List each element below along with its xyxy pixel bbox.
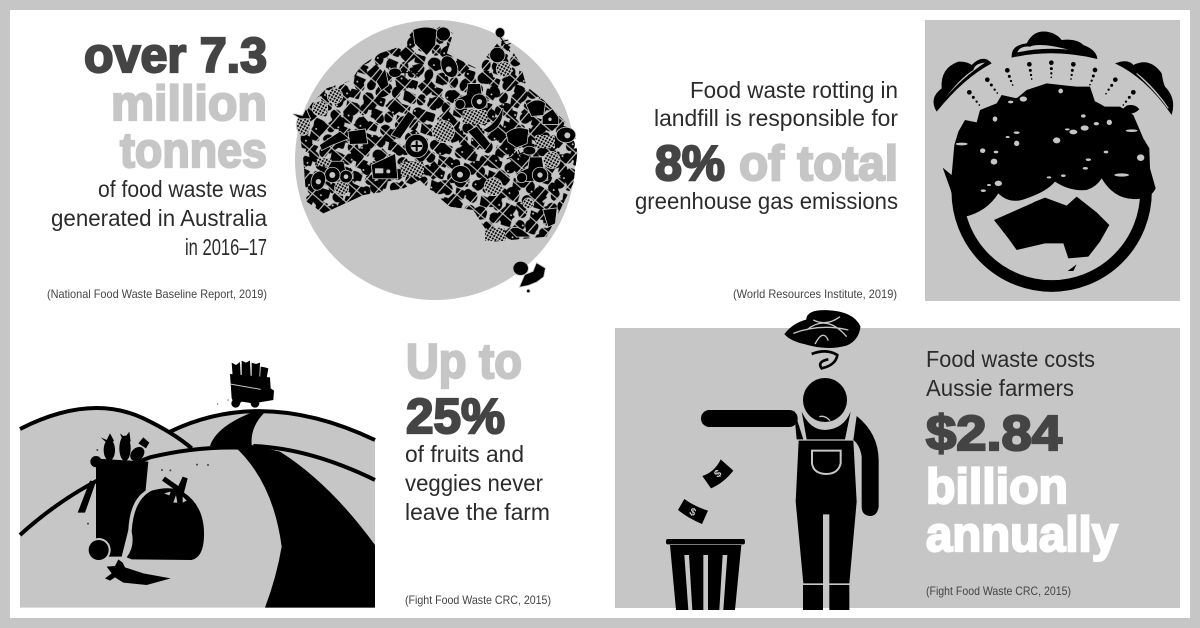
icon: discarded carrot [105, 559, 171, 585]
heading: up to 25%: 25% [406, 390, 505, 444]
text block: tonnage description: of food waste was [98, 176, 267, 202]
text block: tonnage description: generated in Australia [51, 205, 267, 231]
icon: Tasmania food cluster [513, 262, 545, 292]
icon: falling banknotes: $ [687, 506, 698, 519]
heading: over 7.3 million tonnes [84, 29, 267, 178]
heading: $2.84 billion annually: annually [926, 508, 1118, 562]
icon: trash can [666, 539, 745, 610]
panel: cost to farmers [615, 311, 1180, 610]
icon: farmer figure [701, 378, 879, 610]
icon: chicken leg [320, 132, 348, 150]
icon: right cloud [1115, 61, 1173, 115]
text block: fruit and veg: veggies never [405, 470, 543, 496]
icon: Australia silhouette [994, 197, 1109, 271]
heading: up to 25% [406, 335, 522, 444]
heading: over 7.3 million tonnes: tonnes [120, 124, 267, 178]
source: World Resources Institute: (World Resources Institute, 2019) [733, 287, 897, 301]
globe ring [957, 97, 1146, 286]
heading: over 7.3 million tonnes: million [111, 77, 267, 131]
heading: $2.84 billion annually: billion [926, 460, 1068, 514]
heading: $2.84 billion annually [926, 407, 1118, 562]
icon: lettuces [413, 27, 450, 55]
icon: rising gas dots [967, 60, 1136, 106]
heading: 8% of total: of total [739, 137, 898, 191]
icon: avocados [438, 54, 461, 80]
icon: truck with carrots [230, 361, 274, 408]
icon: falling banknotes [678, 459, 733, 524]
icon: small fish on heap [1120, 105, 1139, 114]
text block: tonnage description: in 2016–17 [185, 234, 267, 260]
icon: rubbish bag [123, 477, 206, 562]
illustration: farmer dropping money in a bin [666, 311, 879, 610]
text block: cost intro [926, 346, 1095, 401]
text block: landfill intro [654, 77, 898, 131]
text block: cost intro: Food waste costs [926, 346, 1095, 372]
icon: round plate [405, 135, 428, 157]
text block: fruit and veg: of fruits and [405, 441, 524, 467]
heading: 8% of total: 8% [655, 137, 725, 191]
text block: greenhouse gas emissions: greenhouse gas emissions [635, 188, 898, 214]
decorative dust dots [87, 399, 229, 525]
text block: fruit and veg: leave the farm [405, 499, 550, 525]
icon: seed and texture patches [313, 62, 560, 241]
text block: cost intro: Aussie farmers [926, 375, 1074, 401]
panel: food waste tonnage [47, 29, 267, 301]
icon: corn cobs [392, 112, 415, 138]
text block: tonnage description [51, 176, 267, 260]
heading: over 7.3 million tonnes: over 7.3 [84, 29, 267, 83]
back hills [20, 408, 375, 537]
icon: pea pods [483, 108, 503, 133]
heading: up to 25%: Up to [406, 335, 522, 389]
icon: tractors [293, 27, 575, 292]
icon: globe emitting gases in grey square [925, 20, 1180, 301]
icon: pineapple [293, 109, 310, 135]
foreground field [20, 446, 375, 608]
illustration: farm hills with truck, bin and bag [20, 361, 375, 608]
panel: fruit and veg losses [405, 335, 551, 607]
text block: landfill intro: landfill is responsible for [654, 105, 898, 131]
source: baseline report: (National Food Waste Baseline Report, 2019) [47, 287, 267, 301]
icon: bread loaf [348, 129, 367, 144]
waste heap [943, 83, 1156, 217]
panel: greenhouse emissions [635, 77, 898, 301]
icon: wheelie bin with carrots [78, 432, 149, 562]
icon: tangled thought scribble [785, 311, 860, 368]
icon: left cloud [933, 59, 992, 112]
heading: $2.84 billion annually: $2.84 [926, 407, 1062, 461]
source: Fight Food Waste CRC: (Fight Food Waste CRC, 2015) [405, 593, 551, 607]
icon: cheese wedges [372, 154, 397, 178]
text block: fruit and veg [405, 441, 550, 525]
icon: fish skeletons [389, 68, 423, 77]
icon: centre cloud [1012, 31, 1097, 59]
heading: 8% of total [655, 137, 898, 191]
road [210, 410, 375, 608]
source: Fight Food Waste CRC: (Fight Food Waste CRC, 2015) [926, 584, 1071, 598]
text block: landfill intro: Food waste rotting in [690, 77, 898, 103]
icon: falling banknotes: $ [712, 468, 724, 481]
